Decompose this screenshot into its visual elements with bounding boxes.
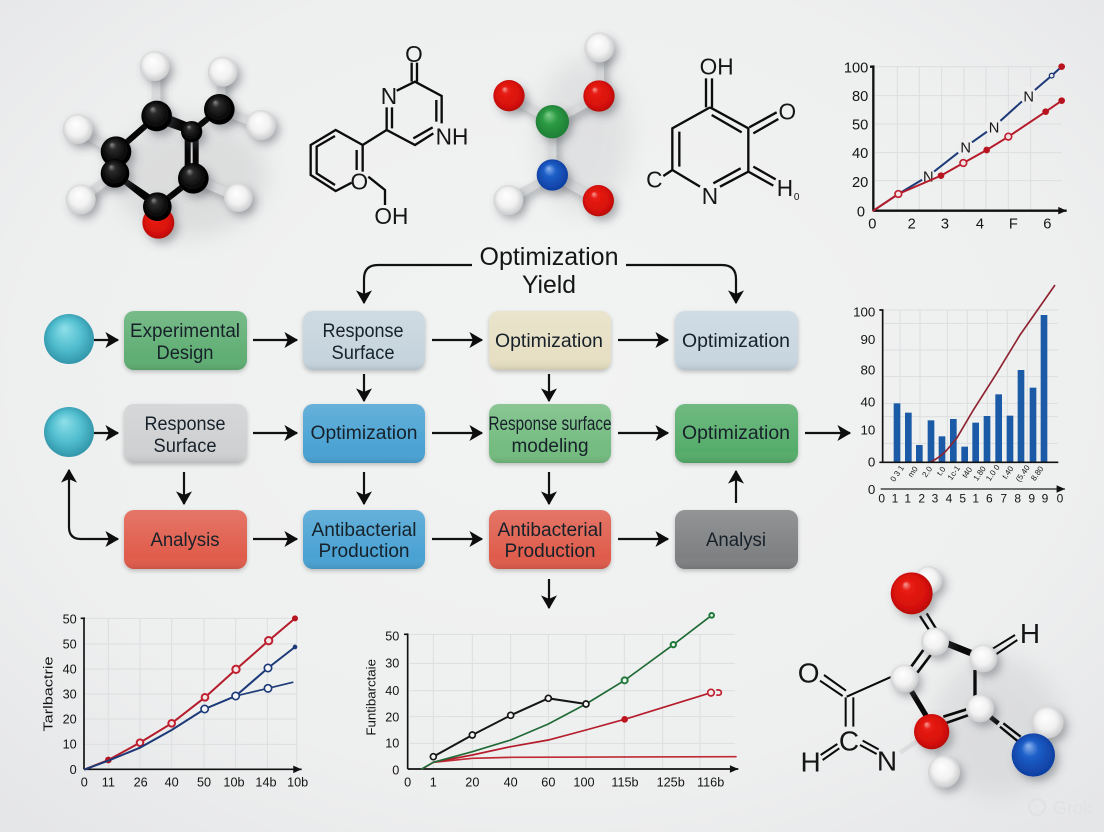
box: Optimization tan	[489, 311, 611, 370]
icon: skeletal formula with NH and OH: O	[405, 41, 423, 67]
blue series	[85, 645, 297, 769]
axis labels: 40	[63, 662, 77, 676]
box: Analysi grey: Analysi	[706, 530, 766, 551]
box: Antibacterial Production red	[489, 510, 611, 569]
axis labels: 30	[63, 687, 77, 701]
axis labels: 100	[573, 776, 595, 790]
icon: coloured ball-and-stick molecule	[493, 32, 630, 216]
rotated bar labels: 8.80	[1029, 464, 1046, 483]
atoms	[890, 566, 1064, 788]
box: Antibacterial Production blue: Production	[318, 541, 410, 562]
atom letters: C	[839, 725, 859, 756]
heading: Optimization Yield: Optimization	[480, 243, 618, 271]
watermark: Grok	[1029, 798, 1093, 818]
atom letters: H	[801, 746, 821, 777]
axis labels: 5	[959, 492, 966, 506]
heading: Optimization Yield: Yield	[522, 271, 576, 299]
black series	[430, 695, 589, 760]
axis labels: 60	[541, 776, 555, 790]
axis labels: 9	[1028, 492, 1035, 506]
arrow: heading to response surface column	[364, 265, 472, 303]
axis labels: 20	[465, 776, 479, 790]
red series	[85, 615, 298, 769]
axis labels: 10b	[287, 775, 308, 789]
axis labels	[385, 629, 724, 790]
box: Optimization tan: Optimization	[495, 331, 603, 352]
axis labels	[844, 61, 1051, 233]
box: Response Surface top: Surface	[332, 343, 394, 364]
arrow: feedback loop	[69, 470, 118, 539]
box: Response Surface top	[303, 311, 425, 370]
atom letters: H	[1020, 618, 1040, 649]
axis labels: 20	[852, 175, 868, 191]
axis labels: 0	[1057, 492, 1064, 506]
box: Optimization light blue	[675, 311, 798, 370]
axis labels: 0	[81, 775, 88, 789]
box: Analysis red: Analysis	[150, 530, 220, 551]
axis labels: 10	[385, 737, 399, 751]
rotated bar labels: t.40	[1000, 464, 1016, 481]
red series	[873, 63, 1065, 211]
axis labels: 6	[1043, 217, 1051, 233]
axis labels: 14b	[255, 775, 277, 789]
rotated bar labels: 1.0 0	[984, 463, 1002, 483]
rotated bar labels: (5.40	[1014, 463, 1032, 484]
y axis title: Tarlbactrie	[40, 656, 55, 731]
axis labels: 2	[918, 492, 925, 506]
axis labels: 0	[404, 776, 411, 790]
axis labels: 80	[852, 89, 868, 105]
box: Response Surface grey: Surface	[154, 436, 216, 457]
icon: skeletal formula with OH and N: C	[646, 166, 663, 192]
axis labels: 10	[63, 738, 77, 752]
axis labels: 10b	[223, 775, 245, 789]
axis labels	[63, 613, 308, 789]
axis labels: 115b	[611, 776, 639, 790]
axis labels: 0	[868, 454, 875, 469]
axis labels: 40	[165, 775, 179, 789]
blue series: N	[989, 120, 999, 136]
axis labels: 50	[63, 637, 77, 651]
box: Response Surface top: Response	[322, 321, 404, 342]
rotated bar labels: t.0	[935, 465, 948, 477]
axis labels: 80	[861, 363, 875, 378]
axis labels: 0	[868, 217, 876, 233]
axis labels: 3	[941, 217, 949, 233]
blue series	[873, 67, 1062, 211]
atom letters: N	[877, 746, 897, 777]
box: Antibacterial Production blue	[303, 510, 425, 569]
axis labels: 50	[852, 117, 868, 133]
box: Antibacterial Production red: Antibacterial	[498, 520, 602, 541]
box: Experimental Design	[124, 311, 247, 370]
line chart: bottom centre	[364, 613, 738, 790]
box: Antibacterial Production blue: Antibacterial	[312, 520, 416, 541]
axis labels: 1	[430, 776, 437, 790]
icon: skeletal formula with OH and N: 0	[794, 192, 800, 203]
axis labels: 100	[853, 304, 875, 319]
watermark: Grok: Grok	[1053, 798, 1093, 818]
blue series: N	[1023, 89, 1034, 105]
axis labels: 100	[844, 61, 868, 77]
axis labels: F	[1009, 217, 1018, 233]
axis labels: 0	[70, 763, 77, 777]
red series	[423, 689, 721, 768]
rotated bar labels: m0	[906, 464, 920, 479]
axis labels: 9	[1042, 492, 1049, 506]
axis labels: 40	[504, 776, 518, 790]
red trend curve	[930, 285, 1055, 462]
icon: skeletal formula with NH and OH: N	[381, 83, 397, 109]
red flat line	[433, 757, 736, 762]
axis labels: 7	[1000, 492, 1007, 506]
rotated bar labels	[889, 463, 1046, 484]
axis labels: 4	[946, 492, 953, 506]
axis labels: 40	[385, 684, 399, 698]
axis labels: 1	[904, 492, 911, 506]
rotated bar labels: 0 3 1	[889, 463, 906, 483]
icon: cyan sphere row 2	[44, 407, 94, 457]
axis labels: 10	[861, 423, 875, 438]
panel: flow diagram	[44, 311, 850, 608]
axis labels: 6	[986, 492, 993, 506]
line chart: bottom left	[40, 613, 308, 789]
axis labels: 0	[857, 204, 865, 220]
atom letters	[798, 618, 1040, 777]
box: Experimental Design: Design	[156, 343, 214, 364]
axis labels: 26	[134, 775, 148, 789]
box: Optimization green: Optimization	[682, 423, 790, 444]
icon: skeletal formula with NH and OH: O	[351, 169, 368, 195]
axis labels: 3	[932, 492, 939, 506]
bonds	[820, 613, 1021, 760]
axis labels: 1	[972, 492, 979, 506]
box: Antibacterial Production red: Production	[504, 541, 596, 562]
y axis title: Funtibarctaie	[364, 659, 379, 736]
box: Experimental Design: Experimental	[130, 321, 240, 342]
axis labels: 50	[385, 629, 399, 643]
blue series: N	[960, 141, 971, 157]
rotated bar labels: 1.80	[971, 464, 988, 483]
axis labels: 40	[852, 146, 868, 162]
icon: skeletal formula with OH and N: N	[702, 183, 718, 209]
axis labels: 50	[63, 613, 77, 627]
heading: Optimization Yield	[480, 243, 618, 299]
box: Response Surface grey: Response	[144, 414, 226, 435]
axis labels: 8	[1014, 492, 1021, 506]
axis labels: 0	[392, 763, 399, 777]
rotated bar labels: 1c-1	[946, 464, 962, 482]
axis labels: 1	[892, 492, 899, 506]
icon: skeletal formula with OH and N: OH	[700, 54, 734, 80]
box: Optimization blue: Optimization	[310, 423, 418, 444]
arrows: vertical flow	[184, 374, 736, 608]
arrows: horizontal flow	[94, 340, 850, 539]
axis labels: 0	[868, 482, 875, 497]
bars	[894, 315, 1047, 462]
axis labels: 30	[385, 657, 399, 671]
axis labels: 20	[63, 712, 77, 726]
box: Analysis red	[124, 510, 247, 569]
axis labels: 90	[861, 332, 875, 347]
axis labels: 125b	[657, 776, 685, 790]
axis labels: 11	[102, 775, 115, 789]
box: Response Surface grey	[124, 404, 247, 463]
box: Response surface modeling	[488, 404, 612, 463]
line chart: top right	[844, 61, 1067, 233]
axis labels: 50	[197, 775, 211, 789]
icon: hybrid molecule bottom right	[798, 566, 1064, 797]
rotated bar labels: t40	[960, 465, 974, 480]
icon: skeletal formula with NH and OH: NH	[436, 124, 468, 150]
box: Optimization green	[675, 404, 798, 463]
axis labels: 40	[861, 394, 875, 409]
rotated bar labels: 2.0	[920, 464, 934, 479]
icon: skeletal formula with OH and N: H	[777, 175, 793, 201]
bar chart: right	[853, 285, 1065, 506]
axis labels: 0	[878, 492, 885, 506]
icon: skeletal formula with NH and OH: OH	[374, 203, 408, 229]
blue series: N	[923, 169, 934, 185]
icon: skeletal formula with OH and N: O	[779, 99, 796, 125]
axis labels: 20	[385, 711, 399, 725]
icon: cyan sphere row 1	[44, 314, 94, 364]
axis labels: 2	[908, 217, 916, 233]
axis labels: 4	[976, 217, 984, 233]
atom letters: O	[798, 657, 820, 688]
axis labels: 116b	[697, 776, 724, 790]
arrow: heading to last column	[626, 265, 736, 303]
box: Optimization light blue: Optimization	[682, 331, 790, 352]
icon: skeletal formula with OH and N	[646, 54, 800, 209]
icon: skeletal formula with NH and OH	[311, 41, 468, 229]
box: Response surface modeling: modeling	[512, 436, 588, 457]
icon: black ball-and-stick molecule	[63, 51, 276, 239]
axis labels	[853, 304, 1064, 506]
box: Optimization blue	[303, 404, 425, 463]
box: Response surface modeling: Response surface	[488, 414, 612, 435]
green series	[422, 613, 714, 769]
box: Analysi grey	[675, 510, 798, 569]
